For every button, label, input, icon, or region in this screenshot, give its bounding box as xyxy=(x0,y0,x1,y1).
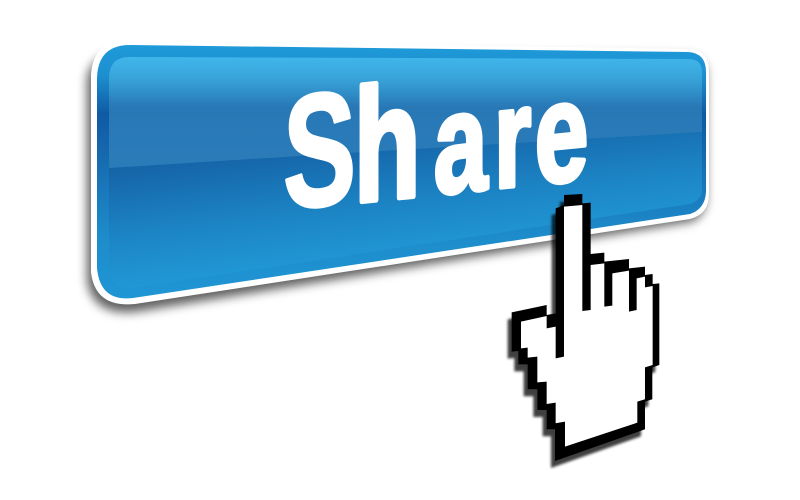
button white border xyxy=(91,40,709,304)
button xyxy=(87,34,709,312)
share label: S xyxy=(283,57,356,244)
hand white fill xyxy=(521,205,653,447)
icon: pixel hand cursor xyxy=(508,194,659,468)
hand black outline xyxy=(512,194,659,461)
share label: h xyxy=(354,52,420,237)
button gloss upper face xyxy=(109,57,702,168)
button blue rim xyxy=(97,45,706,298)
share label: are xyxy=(434,50,588,224)
hand shadow xyxy=(508,201,655,468)
button lower face xyxy=(109,125,702,288)
button drop shadow xyxy=(87,52,706,312)
